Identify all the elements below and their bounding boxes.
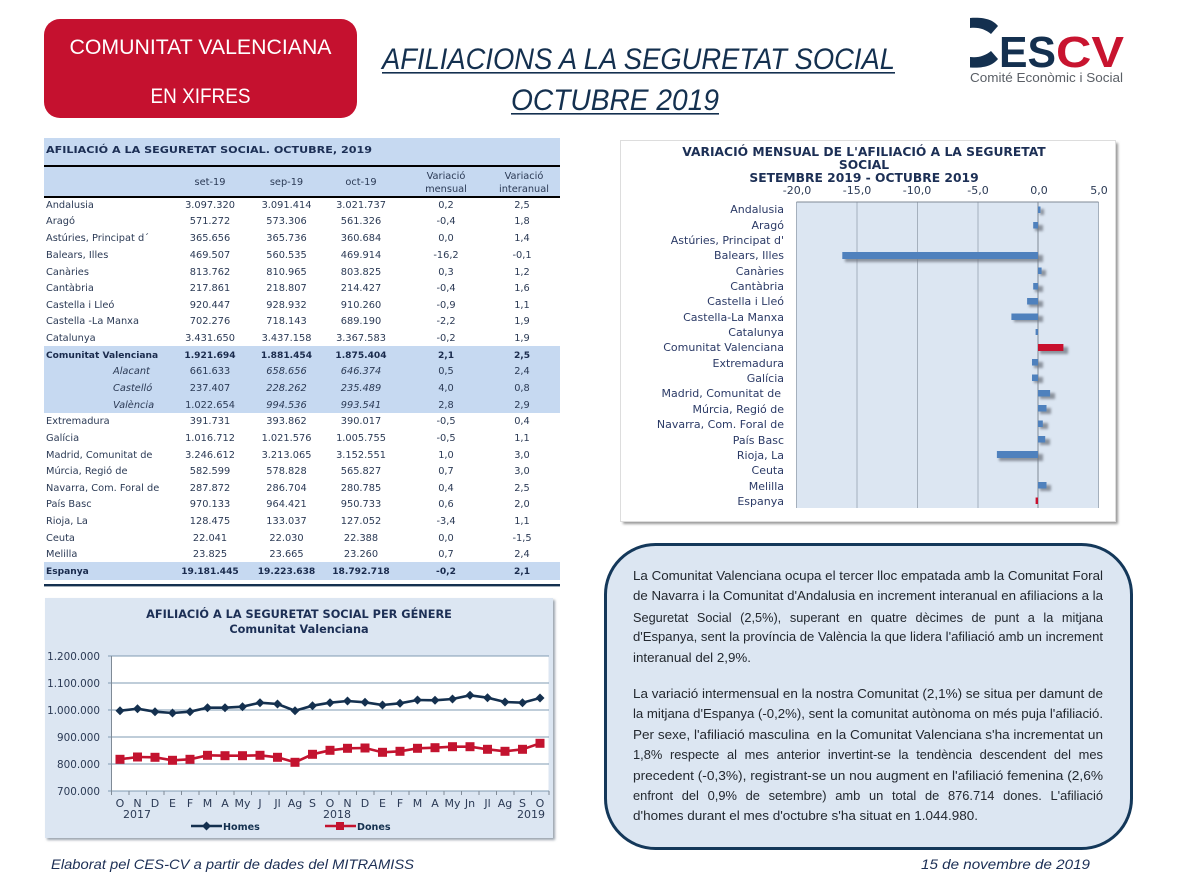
title (380, 43, 895, 117)
table rows: regions: 469.507 (190, 250, 230, 261)
table row: Comunitat Valenciana: 1.875.404 (335, 351, 387, 361)
table rows: regions: 689.190 (341, 316, 381, 327)
table rows: remaining regions: -0,5 (436, 416, 456, 427)
table rows: regions: 360.684 (341, 233, 381, 244)
table row: Espanya: 19.181.445 (181, 567, 239, 577)
x axis labels: My (234, 797, 251, 810)
x axis labels: N (343, 797, 352, 810)
table rows: regions: 1,8 (514, 216, 530, 227)
category labels: Múrcia, Regió de (692, 403, 784, 416)
table column headers: Variació (427, 170, 465, 182)
table rows: remaining regions: 2,0 (514, 499, 530, 510)
table rows: remaining regions: 23.825 (193, 549, 227, 560)
table column headers: interanual (499, 184, 549, 195)
table rows: remaining regions: 950.733 (341, 499, 381, 510)
table rows: remaining regions: 1.021.576 (262, 433, 311, 444)
table rows: remaining regions: 128.475 (190, 516, 230, 527)
table rows: regions: -0,1 (512, 250, 532, 261)
table rows: remaining regions: 287.872 (190, 483, 230, 494)
table rows: regions: 1,2 (514, 267, 530, 278)
table rows: provinces: 1.022.654 (185, 400, 235, 411)
table rows: remaining regions: 286.704 (266, 483, 307, 494)
table rows: remaining regions: 22.030 (269, 533, 304, 544)
category labels: Aragó (751, 219, 784, 232)
x axis labels: M (413, 797, 422, 810)
x axis labels: 2017 (123, 808, 151, 821)
table rows: regions: -0,4 (436, 283, 456, 294)
table rows: regions: 1,1 (514, 300, 530, 311)
x axis labels (116, 797, 545, 821)
category labels: País Basc (733, 434, 784, 447)
table row: Espanya (46, 567, 530, 577)
table rows: remaining regions: 964.421 (266, 499, 307, 510)
plot area and grid (796, 202, 1098, 508)
paragraph 1: de Navarra i la Comunitat d'Andalusia en increment interanual en afiliacions a la (633, 589, 1103, 603)
table rows: regions: 810.965 (266, 267, 307, 278)
table row: Espanya: 19.223.638 (258, 567, 315, 577)
panel: affiliation table (44, 138, 560, 586)
x axis labels: Jl (273, 797, 281, 810)
y axis labels: 1.200.000 (47, 651, 100, 663)
table rows: regions: 1,4 (514, 233, 530, 244)
x axis labels: Jn (464, 797, 475, 810)
bars (842, 206, 1050, 488)
table rows: remaining regions: 1,1 (514, 516, 530, 527)
table rows: remaining regions: País Basc (46, 498, 92, 510)
table row: Espanya: 18.792.718 (332, 567, 390, 577)
table row: Comunitat Valenciana: 2,5 (514, 351, 530, 361)
category labels: Navarra, Com. Foral de (657, 418, 784, 431)
table rows: regions: 561.326 (341, 216, 381, 227)
category labels: Rioja, La (737, 449, 784, 462)
paragraph 1 (633, 569, 1104, 665)
table rows: remaining regions: 391.731 (190, 416, 230, 427)
x axis labels: F (187, 797, 193, 810)
table header band (44, 138, 560, 198)
table rows: provinces: 4,0 (438, 383, 454, 394)
category labels: Astúries, Principat d' (671, 234, 784, 247)
table rows: regions: 3.097.320 (185, 200, 235, 211)
footer: date: 15 de novembre de 2019 (921, 856, 1090, 872)
panel: gender line chart (45, 598, 555, 840)
table rows: provinces (112, 366, 530, 411)
paragraph 2: Per sexe, l'afiliació masculina en la Comunitat Valenciana s'ha incrementat un (633, 728, 1103, 742)
badge: Comunitat Valenciana en xifres: EN XIFRES (150, 85, 250, 108)
logo: CES-CV: ES (999, 28, 1056, 77)
table rows: provinces: 0,8 (514, 383, 530, 394)
category labels: Galícia (747, 372, 784, 385)
table column headers (195, 170, 549, 195)
x axis labels: Ag (288, 797, 302, 810)
table rows: remaining regions: Navarra, Com. Foral de (46, 483, 159, 494)
chart title (682, 144, 1046, 185)
x axis labels: Ag (498, 797, 512, 810)
table rows: remaining regions: Extremadura (46, 416, 110, 427)
table rows: regions: 365.736 (266, 233, 307, 244)
table rows: regions: 928.932 (266, 300, 307, 311)
table rows: remaining regions: 578.828 (266, 466, 307, 477)
table rows: regions: 1,9 (514, 316, 530, 327)
table rows: regions: 469.914 (341, 250, 381, 261)
paragraph 2: enfront del 0,9% de setembre) amb un total de 876.714 dones. L'afiliació (633, 789, 1103, 803)
paragraph 1: Seguretat Social (2,5%), superant en quatre dècimes de punt a la mitjana (633, 611, 1103, 625)
table rows: remaining regions: 393.862 (266, 416, 307, 427)
x axis labels: O (326, 797, 335, 810)
table row: Comunitat Valenciana: 2,1 (438, 351, 454, 361)
legend: Dones (357, 822, 391, 833)
table rows: remaining regions: 22.388 (344, 533, 378, 544)
bar shadows (845, 209, 1068, 491)
table rows: remaining regions: 127.052 (341, 516, 381, 527)
table rows: regions: -16,2 (433, 250, 459, 261)
table rows: remaining regions: 0,7 (438, 466, 454, 477)
paragraph 2: d'homes durant el mes d'octubre s'ha situat en 1.044.980. (633, 809, 978, 823)
chart title: AFILIACIÓ A LA SEGURETAT SOCIAL PER GÉNERE (146, 608, 452, 621)
table rows: regions: 3.021.737 (336, 200, 386, 211)
table rows: regions: 573.306 (266, 216, 307, 227)
y axis labels (47, 651, 100, 798)
table rows: provinces: Castelló (113, 382, 152, 394)
table rows: remaining regions: Melilla (46, 549, 77, 560)
title: OCTUBRE 2019 (511, 84, 719, 117)
category labels: Balears, Illes (714, 249, 784, 262)
x axis labels: D (151, 797, 159, 810)
table rows: remaining regions: 3,0 (514, 450, 530, 461)
table rows: regions: 813.762 (190, 267, 230, 278)
table column headers: mensual (425, 184, 467, 195)
top axis labels: 0,0 (1030, 184, 1048, 197)
table rows: remaining regions: 3.213.065 (262, 450, 311, 461)
table rows: regions: Astúries, Principat d´ (46, 232, 149, 244)
table rows: regions: 1,9 (514, 333, 530, 344)
top axis labels: -20,0 (783, 184, 811, 197)
table rows: remaining regions: 1,1 (514, 433, 530, 444)
category labels: Ceuta (752, 464, 784, 477)
paragraph 1: La Comunitat Valenciana ocupa el tercer lloc empatada amb la Comunitat Foral (633, 569, 1103, 583)
table rows: provinces: 661.633 (190, 366, 230, 377)
table rows: remaining regions: 23.260 (344, 549, 378, 560)
table column headers: Variació (505, 170, 543, 182)
chart title: VARIACIÓ MENSUAL DE L'AFILIACIÓ A LA SEGURETAT (682, 144, 1046, 159)
y axis labels: 1.000.000 (47, 705, 100, 717)
table rows: remaining regions: 582.599 (190, 466, 230, 477)
y axis labels: 900.000 (57, 732, 100, 744)
category labels: Espanya (737, 495, 784, 508)
table rows: regions: 365.656 (190, 233, 230, 244)
table rows: regions: 910.260 (341, 300, 381, 311)
table rows: regions: Cantàbria (46, 282, 94, 294)
table rows: remaining regions: 280.785 (341, 483, 381, 494)
table rows: remaining regions: 0,6 (438, 499, 454, 510)
table rows: regions: 2,5 (514, 200, 530, 211)
table rows: provinces: 993.541 (341, 400, 381, 411)
plot area (108, 656, 549, 795)
table rows: regions: 217.861 (190, 283, 230, 294)
table rows: regions: 571.272 (190, 216, 230, 227)
table rows: regions: 3.437.158 (262, 333, 311, 344)
x axis labels: 2018 (323, 808, 351, 821)
table rows: regions: Balears, Illes (46, 250, 108, 261)
table row: Comunitat Valenciana: Comunitat Valenciana (46, 351, 158, 361)
paragraph 2: 1,8% respecte al mes anterior invertint-se la tendència descendent del mes (633, 748, 1103, 762)
table rows: remaining regions: Múrcia, Regió de (46, 465, 128, 477)
table rows: provinces: 994.536 (266, 400, 307, 411)
table rows: regions: Castella -La Manxa (46, 316, 139, 327)
top axis labels: -15,0 (843, 184, 871, 197)
table rows: regions: 3.367.583 (336, 333, 386, 344)
table rows: remaining regions: 2,4 (514, 549, 530, 560)
category labels: Catalunya (728, 326, 784, 339)
table rows: provinces: 646.374 (341, 366, 381, 377)
table row: Espanya: -0,2 (436, 567, 456, 577)
badge: Comunitat Valenciana en xifres: COMUNITAT VALENCIANA (70, 36, 332, 59)
category labels: Melilla (749, 480, 784, 493)
panel: monthly variation bar chart (620, 140, 1118, 524)
category labels: Canàries (736, 265, 784, 278)
category labels (657, 203, 784, 508)
table rows: regions: 1,6 (514, 283, 530, 294)
line: Homes (120, 695, 540, 713)
line: Dones (120, 743, 540, 762)
table rows: remaining regions: 23.665 (269, 549, 304, 560)
x axis labels: M (203, 797, 212, 810)
logo: CES-CV: CV (1056, 28, 1125, 77)
footer: source: Elaborat pel CES-CV a partir de dades del MITRAMISS (51, 856, 415, 872)
table rows: remaining regions: 0,4 (514, 416, 530, 427)
paragraph 2: La variació intermensual en la nostra Comunitat (2,1%) se situa per damunt de (633, 687, 1103, 701)
table rows: remaining regions: 1.005.755 (336, 433, 386, 444)
table column headers: set-19 (195, 177, 225, 188)
category labels: Madrid, Comunitat de (661, 387, 781, 400)
table rows: remaining regions: Madrid, Comunitat de (46, 450, 152, 461)
paragraph 2: la mitjana d'Espanya (-0,2%), sent la comunitat autònoma on més puja l'afiliació. (633, 707, 1103, 721)
table rows: regions: 702.276 (190, 316, 230, 327)
x axis labels: A (431, 797, 439, 810)
category labels: Castella-La Manxa (683, 311, 784, 324)
table rows: remaining regions: 3.246.612 (185, 450, 235, 461)
table rows: regions: -2,2 (436, 316, 456, 327)
table rows: provinces: 235.489 (341, 383, 381, 394)
table row: Comunitat Valenciana: 1.921.694 (184, 351, 236, 361)
table rows: remaining regions: 2,5 (514, 483, 530, 494)
logo: CES-CV: Comité Econòmic i Social (970, 70, 1123, 85)
table rows: regions: 3.091.414 (262, 200, 311, 211)
table rows: remaining regions: 1.016.712 (185, 433, 235, 444)
chart title: SOCIAL (839, 158, 889, 172)
x axis labels: N (133, 797, 142, 810)
table rows: provinces: 228.262 (266, 383, 307, 394)
x axis labels: S (309, 797, 316, 810)
top axis labels: -10,0 (903, 184, 931, 197)
y axis labels: 1.100.000 (47, 678, 100, 690)
table rows: remaining regions: 0,7 (438, 549, 454, 560)
table rows: regions: 0,0 (438, 233, 454, 244)
table rows: regions: 214.427 (341, 283, 381, 294)
category labels: Extremadura (712, 357, 784, 370)
table rows: remaining regions: 0,0 (438, 533, 454, 544)
chart title: SETEMBRE 2019 - OCTUBRE 2019 (749, 171, 979, 185)
table rows: remaining regions: 565.827 (341, 466, 381, 477)
table rows: remaining regions: 0,4 (438, 483, 454, 494)
table rows: remaining regions: 970.133 (190, 499, 230, 510)
table header band: AFILIACIÓ A LA SEGURETAT SOCIAL. OCTUBRE, 2019 (46, 143, 372, 156)
table rows: provinces: 2,8 (438, 400, 454, 411)
x axis labels: A (221, 797, 229, 810)
table rows: remaining regions: 22.041 (193, 533, 227, 544)
table rows: remaining regions: -3,4 (436, 516, 456, 527)
legend (191, 822, 391, 833)
table rows: regions (46, 200, 532, 344)
category labels: Andalusia (730, 203, 784, 216)
table rows: regions: 218.807 (266, 283, 307, 294)
table rows: remaining regions: -1,5 (512, 533, 532, 544)
paragraph 2 (633, 687, 1103, 823)
table rows: remaining regions (46, 416, 532, 560)
logo: CES-CV (970, 18, 1125, 85)
table column headers: sep-19 (270, 177, 303, 188)
table rows: remaining regions: 1,0 (438, 450, 454, 461)
table rows: remaining regions: Galícia (46, 432, 79, 444)
x axis labels: D (361, 797, 369, 810)
legend: Homes (223, 822, 260, 833)
x axis labels: My (444, 797, 461, 810)
x axis labels: S (519, 797, 526, 810)
top axis labels: -5,0 (967, 184, 989, 197)
table rows: provinces: 2,4 (514, 366, 530, 377)
table rows: regions: 3.431.650 (185, 333, 235, 344)
table column headers: oct-19 (345, 177, 377, 188)
category labels: Castella i Lleó (707, 295, 784, 308)
x axis labels: E (169, 797, 176, 810)
chart title: Comunitat Valenciana (229, 623, 369, 636)
table row: Comunitat Valenciana: 1.881.454 (261, 351, 312, 361)
top axis labels: 5,0 (1090, 184, 1108, 197)
x axis labels: 2019 (517, 808, 545, 821)
table row: Espanya: Espanya (46, 567, 89, 577)
top axis labels (783, 184, 1108, 197)
table rows: regions: 0,3 (438, 267, 454, 278)
table rows: provinces: 237.407 (190, 383, 230, 394)
y axis labels: 800.000 (57, 759, 100, 771)
table rows: provinces: València (113, 399, 154, 411)
table rows: remaining regions: Rioja, La (46, 516, 88, 527)
title: AFILIACIONS A LA SEGURETAT SOCIAL (380, 43, 895, 76)
table rows: regions: Aragó (46, 215, 75, 227)
paragraph 1: interanual del 2,9%. (633, 651, 751, 665)
table rows: provinces: 0,5 (438, 366, 454, 377)
table rows: regions: Castella i Lleó (46, 299, 114, 311)
table rows: provinces: Alacant (112, 366, 151, 377)
table row: Comunitat Valenciana (46, 351, 530, 361)
x axis labels: Jl (483, 797, 491, 810)
table rows: regions: Catalunya (46, 333, 96, 344)
table rows: regions: Andalusia (46, 200, 94, 211)
paragraph 1: d'Espanya, sent la província de València la que lidera l'afiliació amb un increment (633, 630, 1104, 644)
table rows: remaining regions: -0,5 (436, 433, 456, 444)
table rows: regions: 718.143 (266, 316, 307, 327)
table rows: remaining regions: 3.152.551 (336, 450, 386, 461)
paragraph 2: precedent (-0,3%), registrant-se un nou augment en l'afiliació femenina (2,6% (633, 769, 1103, 783)
table rows: remaining regions: 133.037 (266, 516, 307, 527)
x axis labels: J (257, 797, 262, 810)
x axis labels: E (379, 797, 386, 810)
table rows: regions: Canàries (46, 266, 89, 278)
table rows: regions: 0,2 (438, 200, 454, 211)
x axis labels: O (116, 797, 125, 810)
category labels: Cantàbria (730, 280, 784, 293)
highlight bands (44, 346, 560, 586)
x axis labels: F (397, 797, 403, 810)
table rows: remaining regions: 3,0 (514, 466, 530, 477)
table row: Espanya: 2,1 (514, 567, 530, 577)
table rows: regions: -0,9 (436, 300, 456, 311)
panel: commentary text (606, 544, 1132, 848)
category labels: Comunitat Valenciana (663, 341, 784, 354)
x axis labels: O (536, 797, 545, 810)
highlighted bars (1036, 344, 1063, 504)
table rows: regions: -0,4 (436, 216, 456, 227)
table rows: regions: -0,2 (436, 333, 456, 344)
badge: Comunitat Valenciana en xifres (44, 19, 357, 118)
table rows: regions: 560.535 (266, 250, 307, 261)
table rows: regions: 920.447 (190, 300, 230, 311)
table rows: remaining regions: Ceuta (46, 533, 75, 544)
y axis labels: 700.000 (57, 786, 100, 798)
table rows: remaining regions: 390.017 (341, 416, 381, 427)
table rows: regions: 803.825 (341, 267, 381, 278)
table rows: provinces: 2,9 (514, 400, 530, 411)
chart title (146, 608, 452, 636)
table rows: provinces: 658.656 (266, 366, 307, 377)
